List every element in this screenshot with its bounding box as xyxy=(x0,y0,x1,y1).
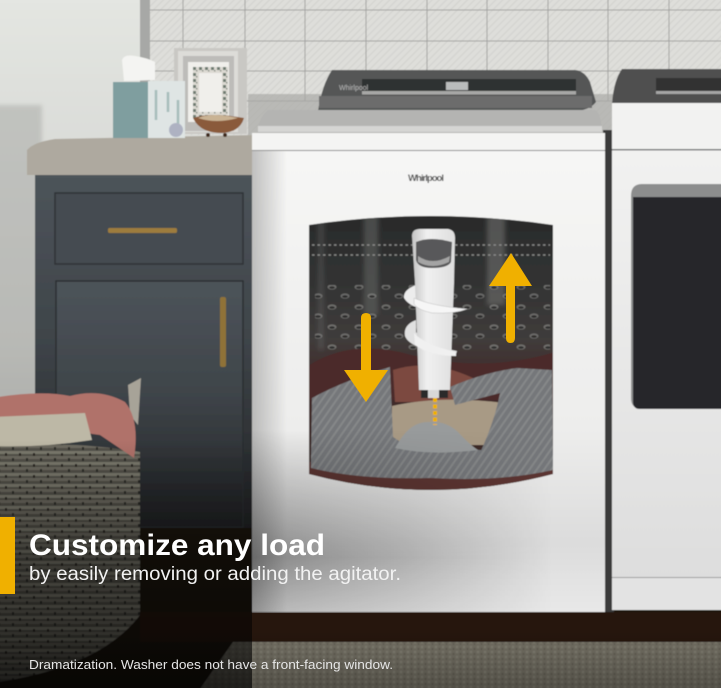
dashed agitator guide xyxy=(433,398,437,425)
washer window xyxy=(308,215,554,490)
accent bar xyxy=(0,517,15,594)
whirlpool logo: Whirlpool xyxy=(408,173,444,184)
picture frame xyxy=(174,48,247,134)
whirlpool lid logo: Whirlpool xyxy=(339,85,369,92)
footnote: Dramatization. Washer does not have a front-facing window. xyxy=(29,658,393,672)
cabinet xyxy=(35,175,252,535)
clothes: red xyxy=(393,366,473,402)
washer lid xyxy=(258,110,602,133)
agitator foot xyxy=(421,390,448,398)
caption heading: Customize any load xyxy=(29,529,325,562)
clothes: knit xyxy=(392,400,505,445)
washer control panel xyxy=(318,70,596,111)
lower fin back xyxy=(405,320,457,354)
agitator body xyxy=(412,229,455,390)
agitator base xyxy=(395,422,478,453)
clothes: dark red band xyxy=(305,348,555,400)
drum highlights xyxy=(318,215,505,350)
countertop xyxy=(27,135,254,175)
floor xyxy=(0,528,721,688)
dryer xyxy=(612,69,721,610)
cabinet drawer xyxy=(55,193,243,264)
washer xyxy=(252,70,605,612)
upper fin back xyxy=(404,285,430,310)
drum perforations xyxy=(315,285,550,350)
laundry basket xyxy=(0,378,141,683)
agitator handle xyxy=(416,239,452,268)
clothes: lower striped sheet xyxy=(310,449,554,480)
rug xyxy=(195,642,721,688)
lower fin front xyxy=(414,333,456,356)
tiled backsplash xyxy=(150,0,721,135)
tissue box xyxy=(113,56,185,138)
gap between machines xyxy=(603,130,614,612)
washer body xyxy=(252,151,605,612)
clothes: right striped sheet xyxy=(450,368,553,462)
clothes: left striped sheet xyxy=(310,366,400,456)
caption subheading: by easily removing or adding the agitator. xyxy=(29,564,401,585)
dark bottom overlay xyxy=(0,430,721,688)
arrow: down xyxy=(344,313,388,402)
cabinet door xyxy=(56,281,243,527)
upper fin front xyxy=(414,298,467,313)
agitator xyxy=(404,229,467,398)
arrow: up xyxy=(489,253,532,343)
decorative bowl xyxy=(193,115,244,137)
